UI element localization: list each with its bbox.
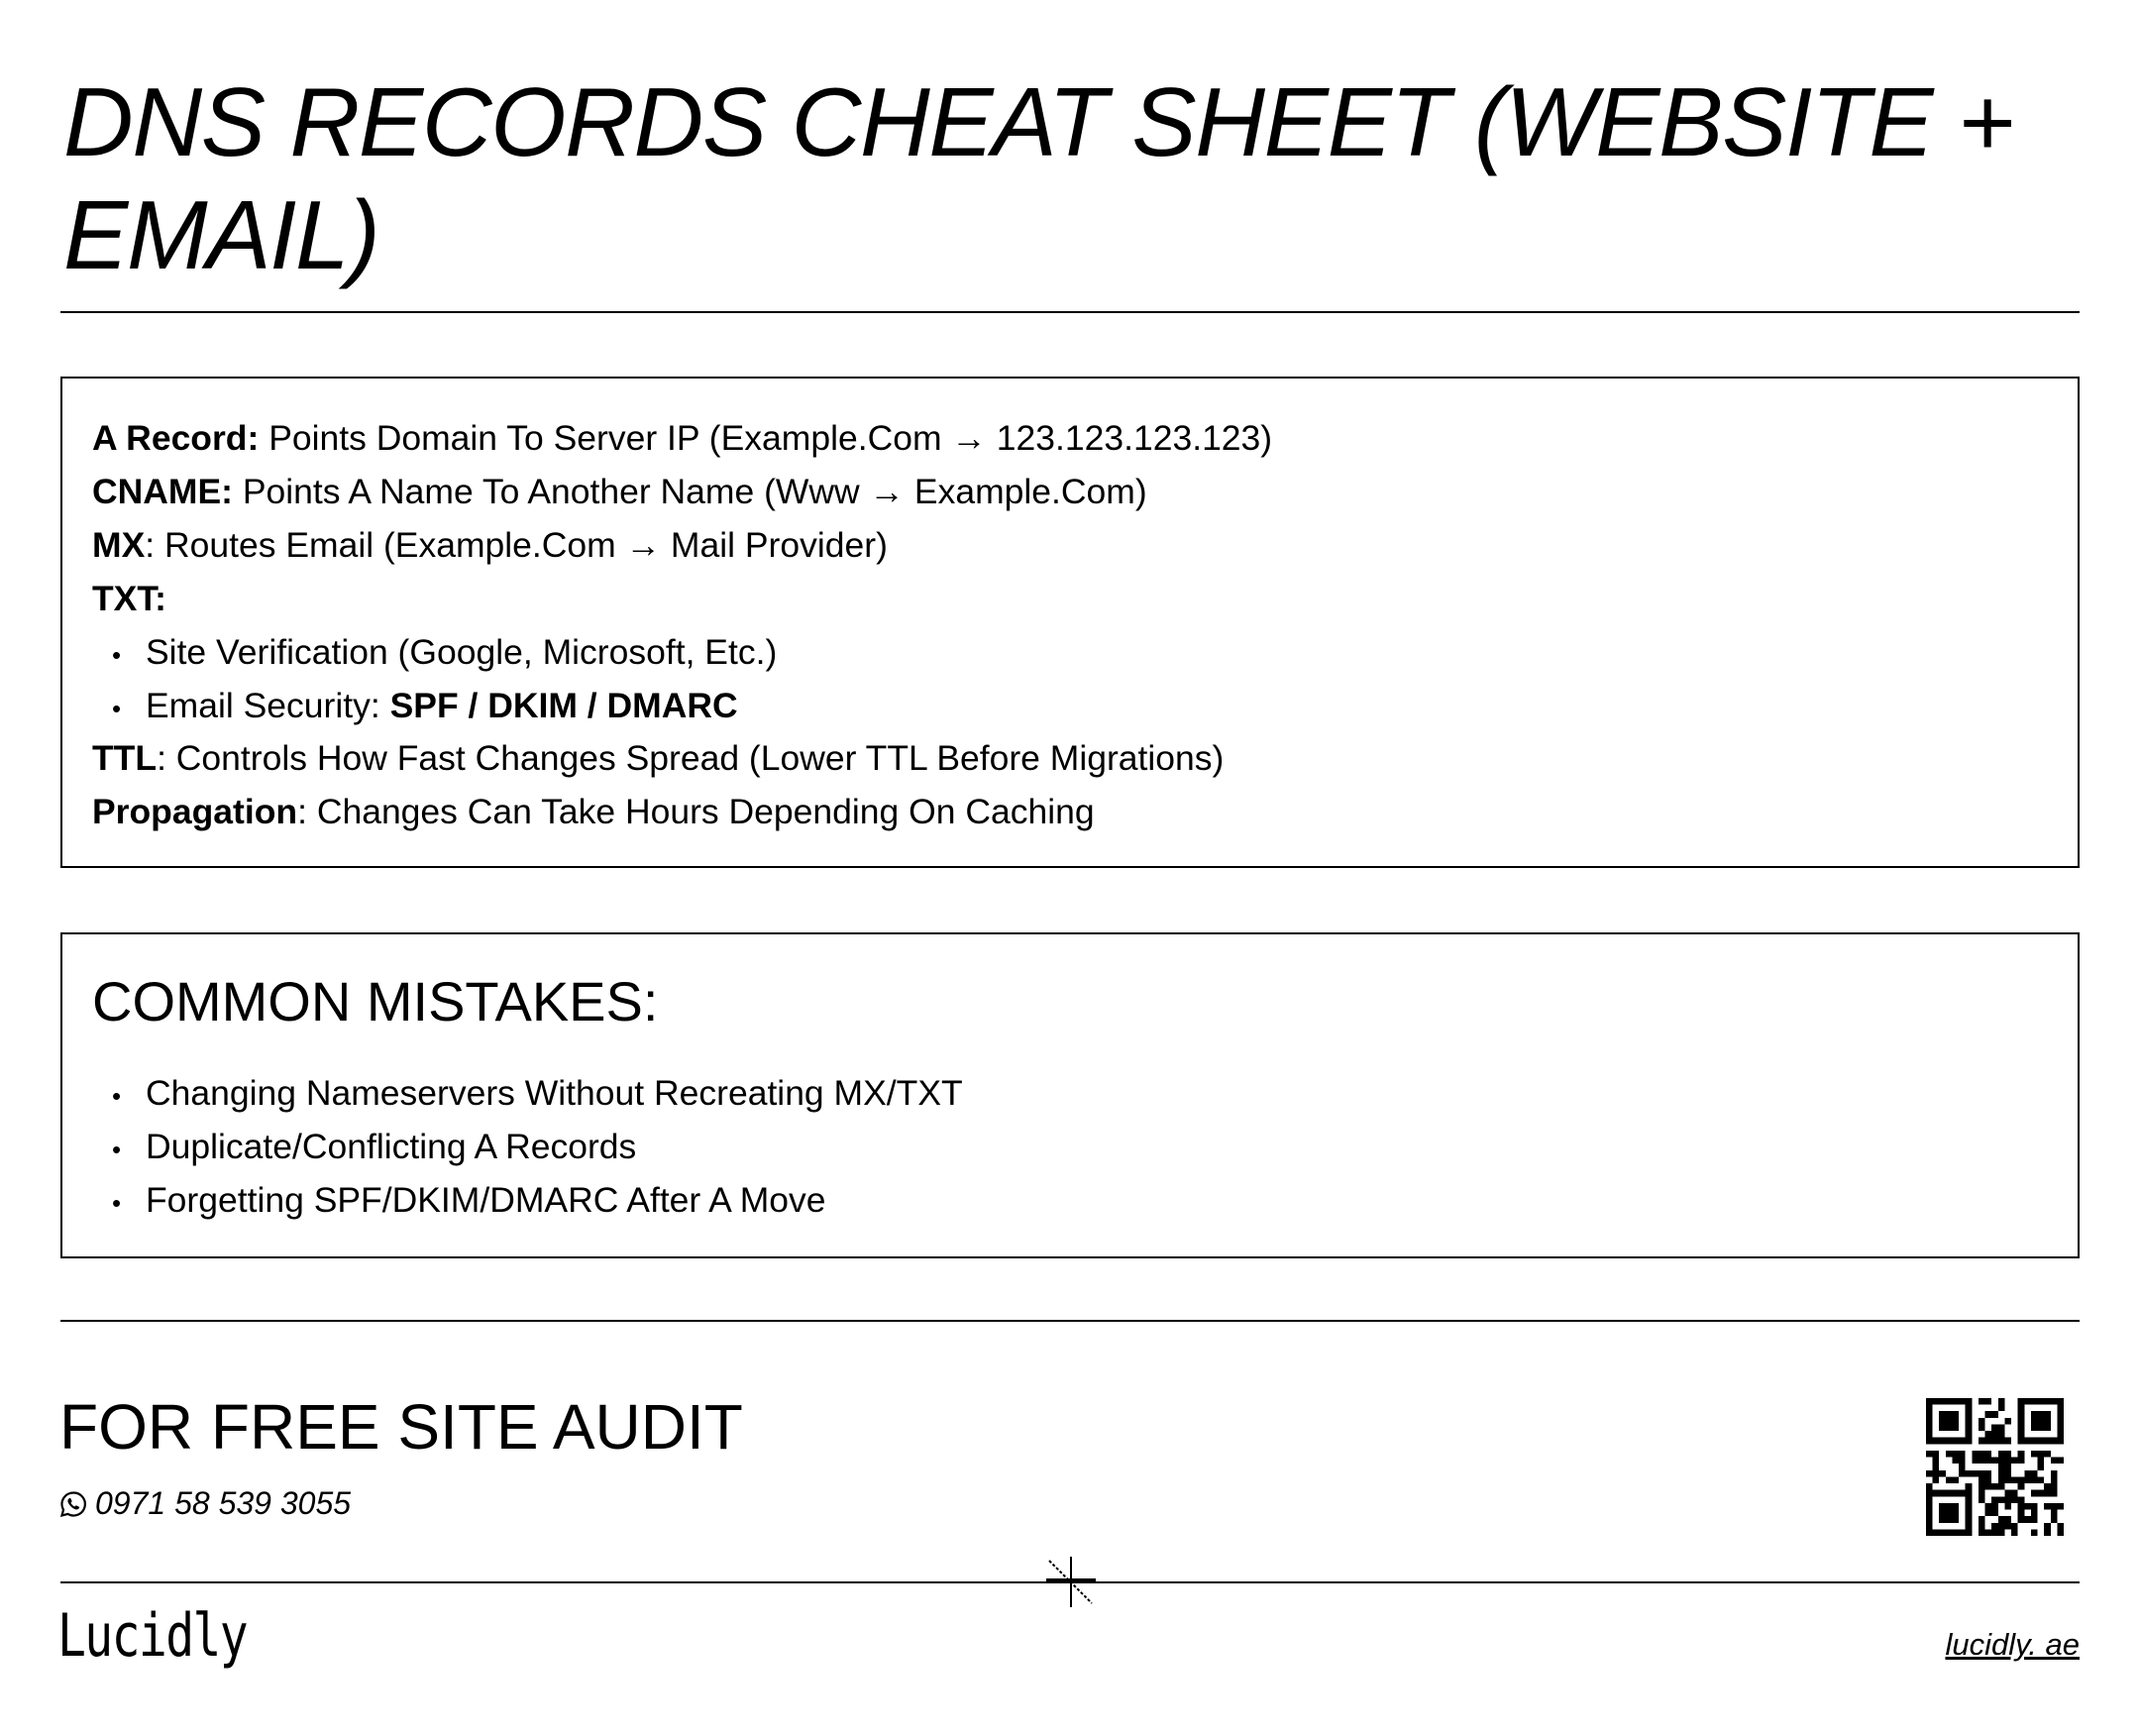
panel: DNS records: [60, 377, 2080, 868]
title: [63, 67, 2013, 289]
title: DNS RECORDS CHEAT SHEET (WEBSITE +: [63, 67, 2013, 176]
icon: whatsapp: [60, 1491, 86, 1517]
bullet 2: Duplicate/Conflicting A Records: [146, 1127, 636, 1166]
bullet 1: Changing Nameservers Without Recreating MX/TXT: [146, 1073, 963, 1113]
text: TTL: TTL: Controls How Fast Changes Spread (Lower TTL Before Migrations): [92, 738, 1224, 778]
QR code: [1926, 1398, 2064, 1536]
text: A record: A Record: Points Domain To Server IP (Example.Com → 123.123.123.123): [92, 418, 1272, 458]
website link: lucidly. ae: [1945, 1627, 2080, 1662]
text: TXT: TXT:: [92, 579, 166, 618]
text: MX: MX: Routes Email (Example.Com → Mail Provider): [92, 525, 888, 565]
text: CNAME: CNAME: Points A Name To Another Name (Www → Example.Com): [92, 472, 1147, 511]
bullet: email security: Email Security: SPF / DKIM / DMARC: [146, 686, 738, 725]
panel: common mistakes: [60, 932, 2080, 1258]
title: EMAIL): [63, 180, 378, 289]
logo: Lucidly: Lucidly: [57, 1601, 247, 1671]
CTA heading: FOR FREE SITE AUDIT: [59, 1391, 743, 1463]
icon: star mark: [1046, 1557, 1096, 1607]
text: propagation: Propagation: Changes Can Take Hours Depending On Caching: [92, 792, 1095, 831]
bullet: site verification: Site Verification (Google, Microsoft, Etc.): [146, 632, 777, 672]
phone contact: 0971 58 539 3055: [95, 1485, 351, 1521]
bullet 3: Forgetting SPF/DKIM/DMARC After A Move: [146, 1180, 826, 1220]
heading: common mistakes: COMMON MISTAKES:: [92, 970, 658, 1032]
